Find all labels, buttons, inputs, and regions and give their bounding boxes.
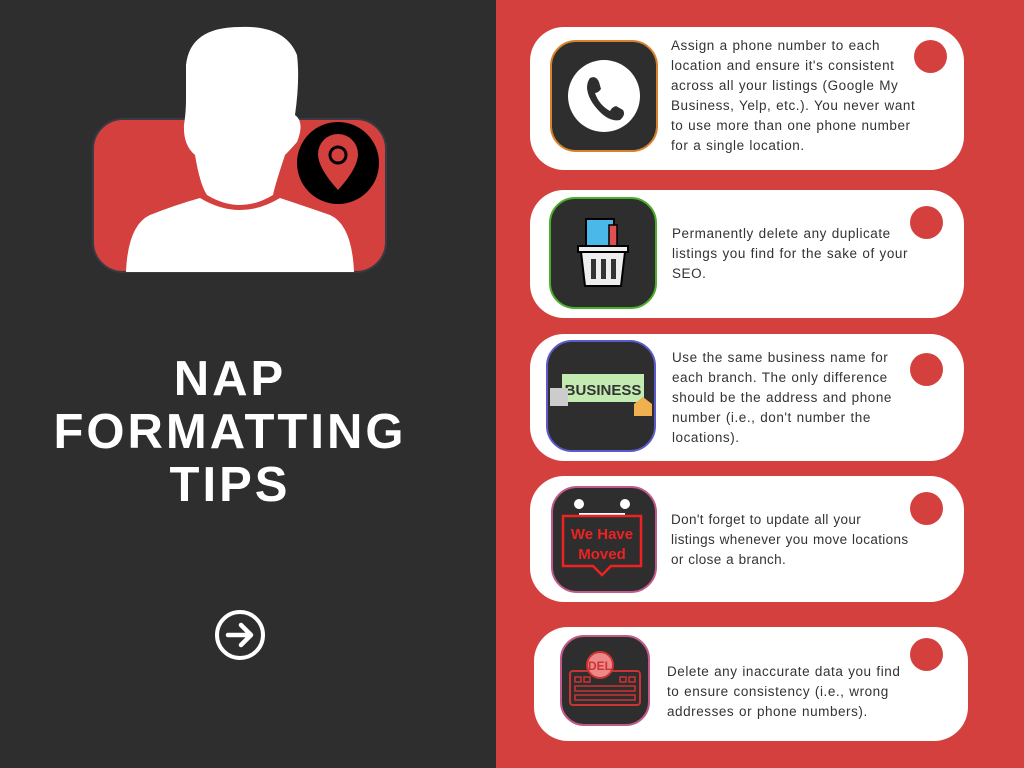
title: NAP xyxy=(174,352,286,406)
title: TIPS xyxy=(170,458,290,512)
icon: we have moved: Moved xyxy=(578,546,626,563)
text: Don't forget to update all your xyxy=(671,512,861,527)
title xyxy=(54,352,406,512)
left panel xyxy=(0,0,496,768)
text: Permanently delete any duplicate listings you find for the sake of your SEO. xyxy=(672,226,908,281)
card 5: delete xyxy=(534,627,968,741)
title: FORMATTING xyxy=(54,405,406,459)
text: listings whenever you move locations xyxy=(671,532,908,547)
text: Delete any inaccurate data you find to ensure consistency (i.e., wrong addresses or phone numbers). xyxy=(667,664,900,719)
icon: trash xyxy=(549,197,657,309)
icon: we have moved: We Have xyxy=(571,526,633,543)
text: or close a branch. xyxy=(671,552,786,567)
icon: keyboard DEL: DEL xyxy=(588,659,612,673)
card 4: moved xyxy=(530,476,964,602)
card 2: trash xyxy=(530,190,964,318)
icon: business sign xyxy=(546,340,656,452)
text: Use the same business name for each branch. The only difference should be the address and phone number (i.e., don't number the locations). xyxy=(672,350,892,445)
icon: arrow circle xyxy=(215,610,265,660)
icon: business sign: BUSINESS xyxy=(565,382,641,399)
text xyxy=(671,512,908,567)
card 3: business xyxy=(530,334,964,461)
icon: phone xyxy=(550,40,658,152)
hero illustration: person with location pin xyxy=(92,26,387,273)
icon: we have moved xyxy=(551,486,657,593)
card 1: phone xyxy=(530,27,964,170)
text: Assign a phone number to each location and ensure it's consistent across all your listings (Google My Business, Yelp, etc.). You never want to use more than one phone number for a single location. xyxy=(671,38,915,153)
icon: keyboard DEL xyxy=(560,635,650,726)
